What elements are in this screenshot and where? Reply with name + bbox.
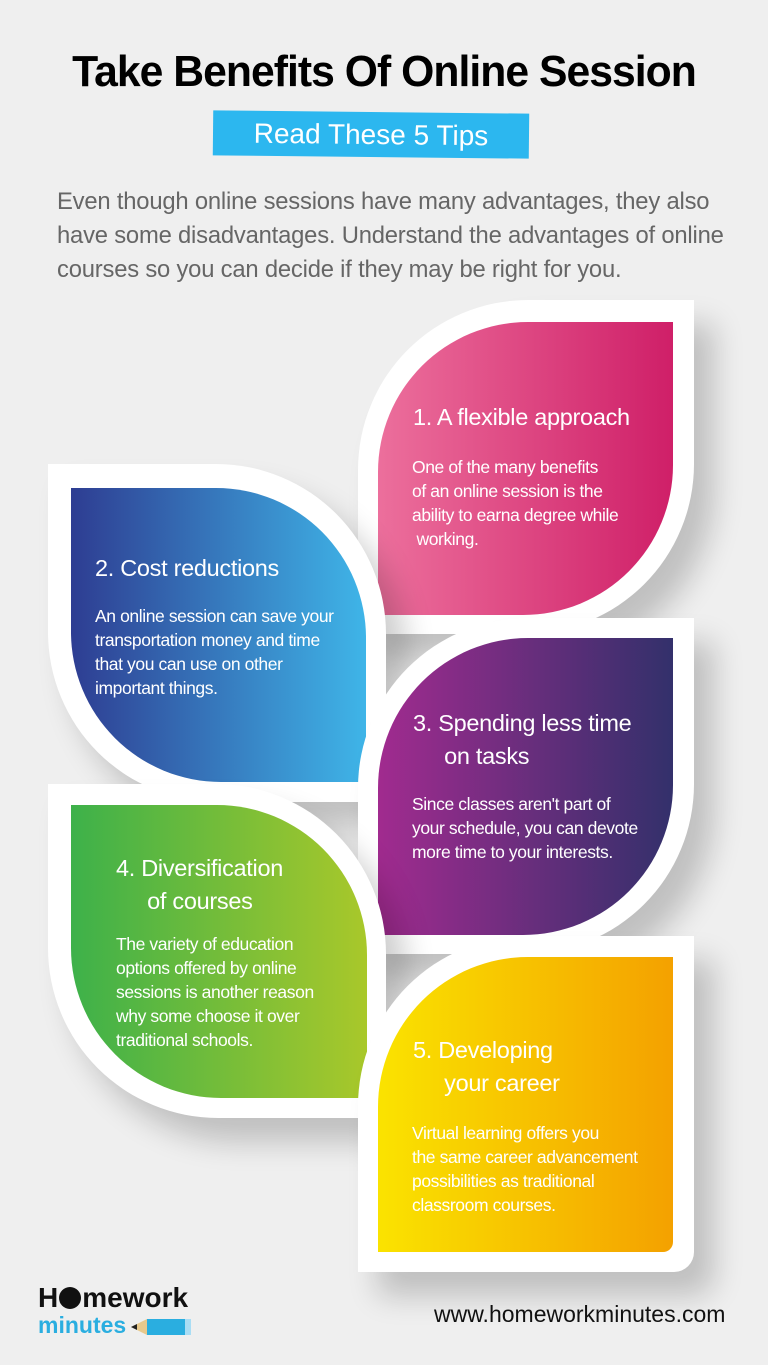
heading 5: your career xyxy=(444,1070,560,1096)
body 3: your schedule, you can devote xyxy=(412,818,638,838)
body 4: The variety of education xyxy=(116,934,293,954)
panel: 2 cost reductions xyxy=(48,464,418,840)
subtitle banner xyxy=(213,110,529,159)
body 4: sessions is another reason xyxy=(116,982,314,1002)
title: Take Benefits Of Online Session xyxy=(72,47,696,96)
intro text: Even though online sessions have many advantages, they also xyxy=(57,188,709,215)
panel: 5 developing career xyxy=(358,936,728,1310)
heading 5 xyxy=(413,1037,560,1096)
body 4: traditional schools. xyxy=(116,1030,253,1050)
body 5: possibilities as traditional xyxy=(412,1171,594,1191)
subtitle banner: Read These 5 Tips xyxy=(254,118,488,151)
body 3 xyxy=(412,794,638,862)
logo xyxy=(38,1282,191,1338)
body 5: the same career advancement xyxy=(412,1147,638,1167)
body 2 xyxy=(95,606,334,698)
logo text bottom: minutes xyxy=(38,1312,126,1338)
body 1: One of the many benefits xyxy=(412,457,598,477)
body 3: more time to your interests. xyxy=(412,842,613,862)
body 1: of an online session is the xyxy=(412,481,603,501)
heading 3: on tasks xyxy=(444,743,529,769)
panel: 1 flexible approach xyxy=(358,300,728,670)
body 2: important things. xyxy=(95,678,218,698)
intro text: have some disadvantages. Understand the advantages of online xyxy=(57,222,724,249)
body 4: why some choose it over xyxy=(116,1006,299,1026)
heading 4 xyxy=(116,855,283,914)
body 1 xyxy=(412,457,618,549)
website url: www.homeworkminutes.com xyxy=(434,1301,725,1327)
panel: 4 diversification xyxy=(48,784,418,1156)
heading 4: of courses xyxy=(147,888,253,914)
body 2: transportation money and time xyxy=(95,630,320,650)
heading 1: 1. A flexible approach xyxy=(413,404,630,430)
heading 2: 2. Cost reductions xyxy=(95,555,279,581)
body 4 xyxy=(116,934,314,1050)
body 5: Virtual learning offers you xyxy=(412,1123,599,1143)
logo text top: H mework xyxy=(38,1282,188,1313)
icon: pencil xyxy=(131,1319,191,1335)
panel: 3 spending less time xyxy=(358,618,728,990)
body 1: working. xyxy=(416,529,478,549)
body 3: Since classes aren't part of xyxy=(412,794,610,814)
body 5: classroom courses. xyxy=(412,1195,556,1215)
heading 5: 5. Developing xyxy=(413,1037,553,1063)
heading 4: 4. Diversification xyxy=(116,855,283,881)
heading 3: 3. Spending less time xyxy=(413,710,631,736)
heading 3 xyxy=(413,710,631,769)
body 1: ability to earna degree while xyxy=(412,505,618,525)
body 4: options offered by online xyxy=(116,958,296,978)
intro text xyxy=(57,188,724,283)
body 2: An online session can save your xyxy=(95,606,334,626)
body 2: that you can use on other xyxy=(95,654,282,674)
body 5 xyxy=(412,1123,638,1215)
intro text: courses so you can decide if they may be right for you. xyxy=(57,256,621,283)
